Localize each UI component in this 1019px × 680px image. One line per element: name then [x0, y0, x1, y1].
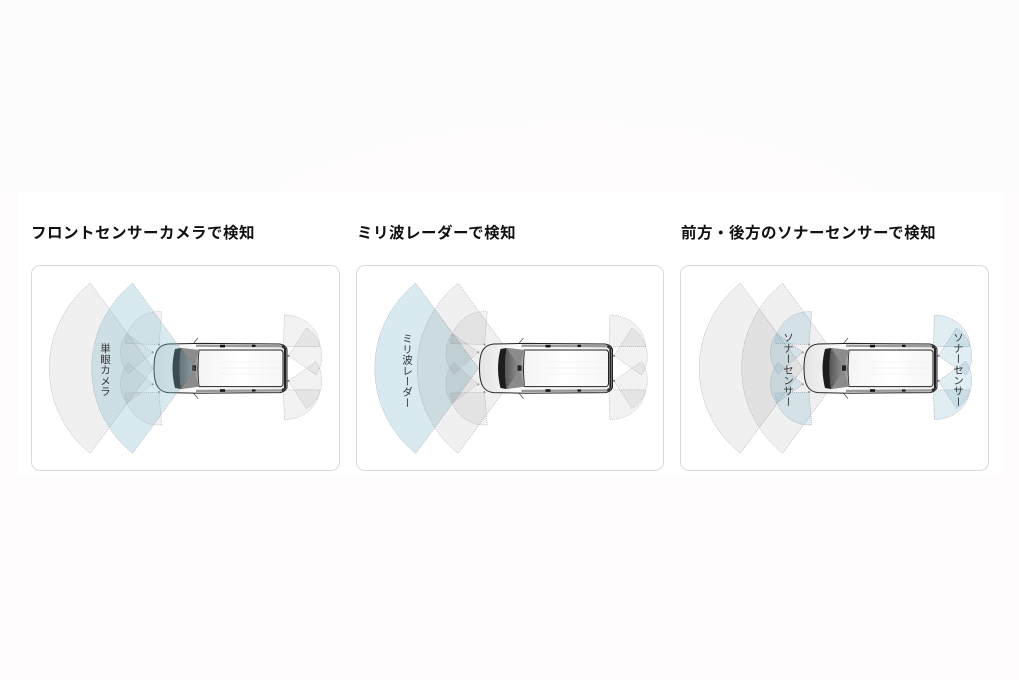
sonar sectors — [120, 312, 322, 425]
label: radar: ミリ波レーダー — [401, 333, 413, 408]
sonar sectors — [446, 312, 647, 425]
diagram: sonar coverage — [699, 283, 972, 453]
label: rear sonar: ソナーセンサー — [952, 332, 964, 407]
car top view — [152, 338, 290, 399]
far sensor sector — [49, 283, 153, 453]
highlighted radar sector — [375, 283, 478, 453]
panel frame: radar — [356, 265, 664, 471]
highlighted sonar sectors — [770, 312, 972, 425]
radar sector — [699, 283, 803, 453]
heading: sonar: 前方・後方のソナーセンサーで検知 — [681, 225, 936, 242]
background band — [0, 0, 1019, 192]
white content sheet — [18, 192, 1003, 475]
highlighted camera sector — [92, 283, 195, 453]
label: monocular camera: 単眼カメラ — [99, 343, 111, 396]
panel frame: front camera — [31, 265, 340, 471]
camera sector — [742, 283, 845, 453]
car top view — [802, 338, 940, 399]
panel frame: sonar — [680, 265, 989, 471]
camera sector — [417, 283, 520, 453]
car top view — [477, 338, 615, 399]
heading: front camera: フロントセンサーカメラで検知 — [31, 225, 255, 242]
label: front sonar: ソナーセンサー — [782, 332, 794, 407]
diagram: front camera coverage — [49, 283, 322, 453]
diagram: radar coverage — [375, 283, 647, 453]
heading: millimeter-wave radar: ミリ波レーダーで検知 — [357, 225, 516, 242]
